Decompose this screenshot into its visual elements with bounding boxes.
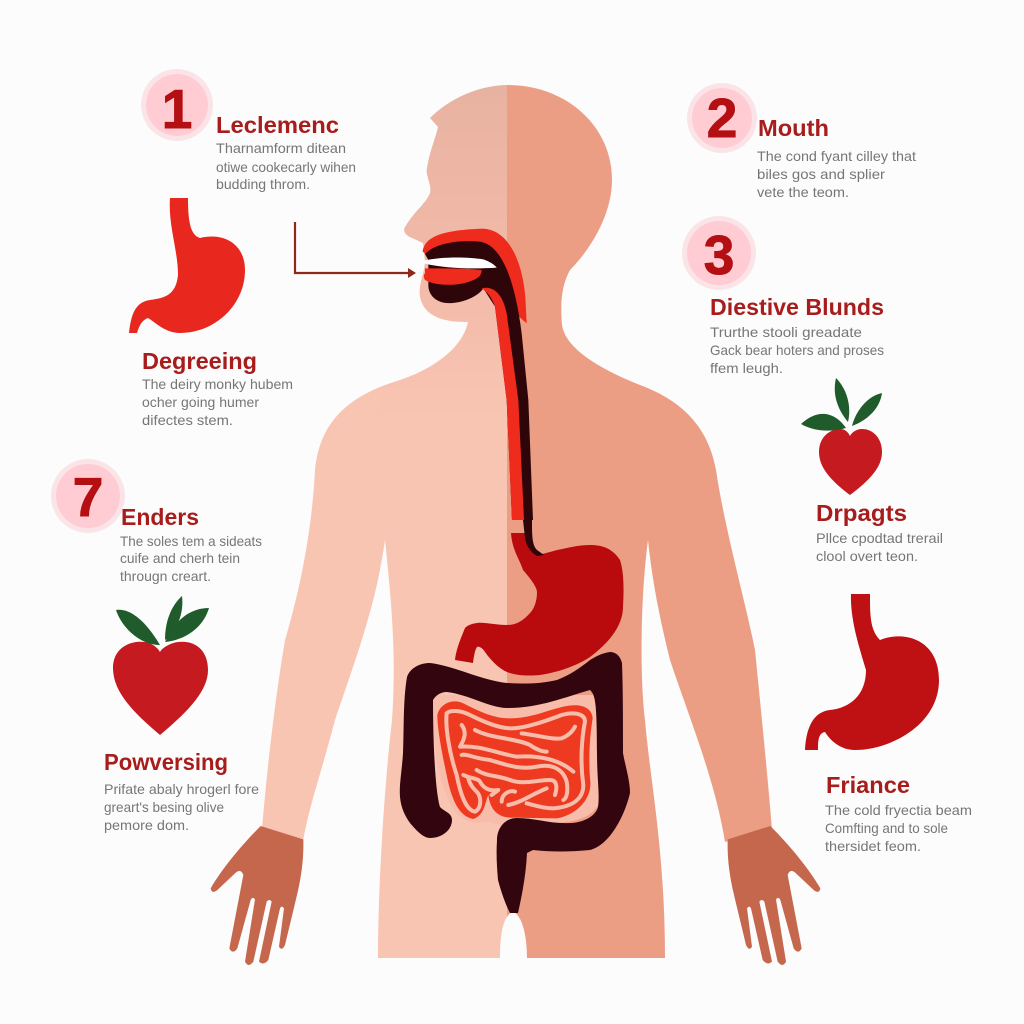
panel: human body silhouette [250,80,787,965]
description: cuife and cherh tein [120,550,240,566]
description: The cond fyant cilley that [757,148,916,164]
description: Tharnamform ditean [216,140,346,156]
badge 7: 7 [73,466,103,528]
description: greart's besing olive [104,799,224,815]
panel: step 3 [682,216,884,376]
heading: Drpagts [816,500,907,526]
heading: Enders [121,504,199,530]
description: biles gos and splier [757,166,885,182]
description: difectes stem. [142,412,233,428]
description: The soles tem a sideats [120,533,262,549]
description: Pllce cpodtad trerail [816,530,943,546]
panel: step 1 [141,69,356,192]
description: clool overt teon. [816,548,918,564]
description [120,533,262,584]
description: budding throm. [216,176,310,192]
esophagus tail [523,520,544,556]
panel: powversing [104,749,259,833]
panel: friance [825,772,972,854]
heading: Leclemenc [216,112,339,138]
description: Gack bear hoters and proses [710,342,884,358]
panel: degreeing [142,348,293,428]
description: pemore dom. [104,817,189,833]
stomach (central) [455,533,624,676]
small intestine [433,695,598,826]
callout arrow [295,222,416,278]
badge 2: 2 [707,87,737,149]
heading: Mouth [758,115,829,141]
description: Comfting and to sole [825,820,948,836]
large intestine [400,652,630,913]
panel: step 2 [687,83,916,200]
heading: Friance [826,772,910,798]
description: Trurthe stooli greadate [710,324,862,340]
description [757,148,916,200]
icon: stomach right [805,594,939,750]
badge 1 [141,69,213,141]
icon: stomach left [129,198,245,333]
icon: apple right [801,378,882,495]
description [825,802,972,854]
description: ocher going humer [142,394,259,410]
description [216,140,356,192]
badge 7 [51,459,125,533]
description: vete the teom. [757,184,849,200]
description: ffem leugh. [710,360,783,376]
description [142,376,293,428]
description [710,324,884,376]
panel: drpagts [816,500,943,564]
description: Prifate abaly hrogerl fore [104,781,259,797]
description [104,781,259,833]
icon: left hand [211,826,303,965]
badge 1: 1 [162,78,192,140]
description: The cold fryectia beam [825,802,972,818]
badge 3: 3 [704,224,734,286]
description: The deiry monky hubem [142,376,293,392]
description: otiwe cookecarly wihen [216,159,356,175]
description: througn creart. [120,568,211,584]
icon: apple left [113,596,209,735]
icon: right hand [728,826,820,965]
panel: step 7 [51,459,262,584]
description [816,530,943,564]
heading: Powversing [104,749,228,775]
badge 2 [687,83,757,153]
badge 3 [682,216,756,290]
heading: Diestive Blunds [710,294,884,320]
description: thersidet feom. [825,838,921,854]
mouth and esophagus [423,229,533,520]
heading: Degreeing [142,348,257,374]
